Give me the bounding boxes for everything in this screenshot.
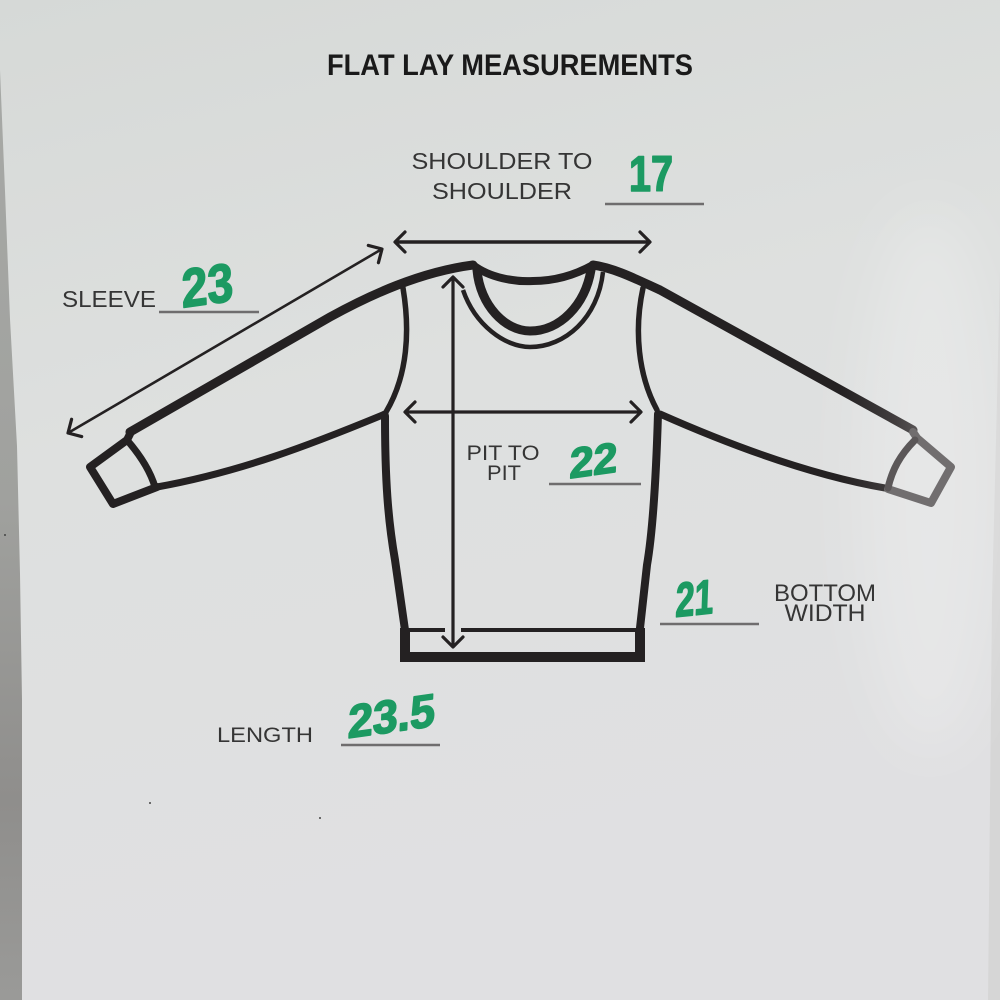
- left body side: [385, 416, 405, 630]
- outer collar: [463, 272, 603, 347]
- hem seam right of arrow: [461, 628, 638, 632]
- arrow: shoulder to shoulder: [395, 240, 650, 244]
- paper specks: [4, 534, 321, 819]
- title: FLAT LAY MEASUREMENTS: [327, 49, 693, 82]
- label: bottom width: BOTTOM: [774, 580, 876, 607]
- label: shoulder to shoulder: SHOULDER TO: [412, 148, 592, 174]
- value: sleeve: 23: [181, 252, 234, 320]
- value: shoulder to shoulder: [605, 146, 704, 204]
- value: shoulder to shoulder: 17: [629, 146, 673, 202]
- right cuff: [888, 432, 951, 503]
- arrow: length: [451, 277, 455, 647]
- value: sleeve: [159, 252, 259, 320]
- label: shoulder to shoulder: [412, 148, 592, 204]
- plastic sleeve edge at right: [985, 250, 1000, 1000]
- left sleeve top edge: [130, 265, 473, 432]
- value: bottom width: [660, 570, 759, 628]
- right cuff seam: [888, 440, 915, 488]
- value: length: 23.5: [347, 684, 436, 748]
- hem seam left of arrow: [407, 628, 445, 632]
- left cuff seam: [127, 440, 155, 487]
- glossy highlight: [860, 210, 1000, 750]
- value: bottom width: 21: [675, 570, 714, 628]
- arrow: pit to pit: [405, 410, 641, 414]
- right body side: [640, 414, 658, 628]
- hem band: [405, 628, 640, 657]
- label: pit to pit: PIT TO: [466, 442, 540, 465]
- label: pit to pit: PIT: [487, 462, 521, 485]
- label: shoulder to shoulder: SHOULDER: [432, 178, 572, 204]
- value: pit to pit: [549, 433, 641, 487]
- right armhole seam: [638, 288, 657, 410]
- right sleeve top edge: [593, 265, 913, 430]
- right sleeve lower edge: [660, 414, 885, 488]
- label: sleeve: SLEEVE: [62, 286, 156, 312]
- left cuff: [90, 434, 157, 504]
- label: bottom width: [774, 580, 876, 627]
- label: length: LENGTH: [217, 724, 313, 747]
- arrow: sleeve: [68, 249, 382, 433]
- value: pit to pit: 22: [569, 433, 618, 487]
- left armhole seam: [386, 288, 407, 412]
- label: bottom width: WIDTH: [784, 600, 866, 627]
- neckline: [473, 265, 593, 281]
- inner collar: [477, 270, 591, 331]
- sweater outline: [90, 265, 951, 657]
- label: pit to pit: [466, 442, 540, 485]
- left sleeve lower edge: [157, 414, 385, 487]
